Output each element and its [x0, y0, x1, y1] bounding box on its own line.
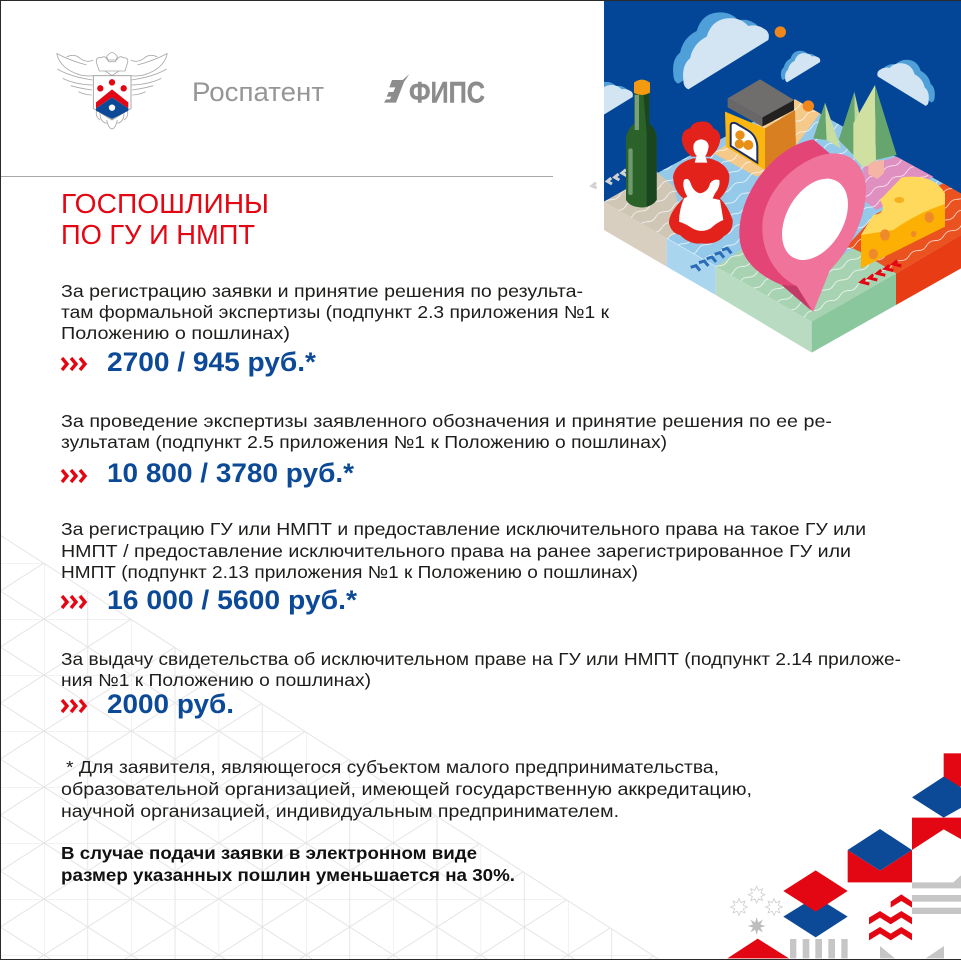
description 2 — [61, 411, 832, 452]
platform — [604, 99, 961, 353]
grey stripes right — [912, 875, 961, 914]
bold note — [61, 843, 515, 885]
description 1: там формальной экспертизы (подпункт 2.3 приложения №1 к — [61, 302, 609, 322]
price 3: 16 000 / 5600 руб.* — [107, 585, 358, 615]
illustration: isometric map with products — [580, 1, 961, 353]
cloud: small — [781, 51, 820, 82]
icon: trees — [813, 85, 897, 179]
grey triangles — [880, 946, 944, 958]
icon: red chevrons 2 — [62, 470, 85, 482]
logo: Rospatent emblem — [57, 52, 167, 129]
cloud: right — [877, 60, 935, 106]
fee block 2 — [61, 411, 832, 488]
description 3: За регистрацию ГУ или НМПТ и предоставление исключительного права на такое ГУ или — [61, 519, 866, 539]
description 3: НМПТ (подпункт 2.13 приложения №1 к Положению о пошлинах) — [61, 562, 638, 582]
cloud: left — [604, 82, 633, 114]
description 2: За проведение экспертизы заявленного обозначения и принятие решения по ее ре- — [61, 411, 832, 431]
lower feathers — [96, 110, 128, 129]
title — [61, 188, 269, 250]
footnote: * Для заявителя, являющегося субъектом малого предпринимательства, — [66, 757, 719, 777]
description 1: Положению о пошлинах) — [61, 323, 290, 343]
description 2: зультатам (подпункт 2.5 приложения №1 к Положению о пошлинах) — [61, 432, 667, 452]
description 3: НМПТ / предоставление исключительного права на ранее зарегистрированное ГУ или — [61, 541, 851, 561]
footnote — [61, 757, 752, 821]
title: ПО ГУ И НМПТ — [61, 219, 255, 250]
icon: woman in folk costume — [669, 122, 733, 244]
icon: location pin — [739, 139, 866, 312]
description 1 — [61, 281, 609, 343]
red zigzags — [869, 894, 912, 940]
grey vertical bars — [790, 939, 848, 958]
logo: FIPS: ФИПС — [409, 76, 485, 110]
fee block 1 — [61, 281, 609, 377]
orange balls — [775, 26, 814, 112]
cloud: large — [673, 12, 769, 89]
icon: wine bottle — [626, 80, 657, 207]
stars — [731, 886, 782, 935]
icon: red chevrons 3 — [62, 596, 85, 608]
envelope shape — [848, 829, 912, 882]
footnote: научной организацией, индивидуальным предпринимателем. — [61, 801, 619, 821]
fee block 4 — [61, 649, 901, 719]
red roof — [727, 939, 789, 958]
description 3 — [61, 519, 866, 582]
left wing — [57, 53, 93, 95]
description 4 — [61, 649, 901, 690]
sky background — [604, 1, 961, 203]
icon: red chevrons 4 — [62, 700, 85, 712]
footnote: образовательной организацией, имеющей государственную аккредитацию, — [61, 779, 752, 799]
logo: Rospatent wordmark: Роспатент — [192, 77, 324, 107]
price 4: 2000 руб. — [107, 689, 234, 719]
description 4: За выдачу свидетельства об исключительном праве на ГУ или НМПТ (подпункт 2.14 приложе- — [61, 649, 901, 669]
title: ГОСПОШЛИНЫ — [61, 188, 269, 219]
crowns — [96, 52, 128, 76]
icon: honey jar — [725, 79, 796, 170]
description 1: За регистрацию заявки и принятие решения по результа- — [61, 281, 583, 301]
right wing — [131, 53, 167, 95]
chevrons: blue — [691, 248, 731, 271]
fee block 3 — [61, 519, 866, 615]
logo: FIPS — [384, 74, 485, 110]
red and blue top shapes — [912, 753, 961, 850]
decoration: geometric shapes bottom right — [727, 753, 961, 958]
background triangle grid — [0, 535, 660, 960]
chevrons: grey — [592, 170, 627, 188]
bold note: размер указанных пошлин уменьшается на 30%. — [61, 865, 515, 885]
divider under logos — [0, 176, 553, 177]
chevrons: red — [861, 261, 901, 284]
shield — [93, 76, 131, 120]
price 2: 10 800 / 3780 руб.* — [107, 458, 355, 488]
description 4: ния №1 к Положению о пошлинах) — [61, 670, 371, 690]
icon: cheese — [861, 177, 945, 268]
bold note: В случае подачи заявки в электронном виде — [61, 843, 477, 863]
stacked diamonds — [783, 870, 848, 937]
price 1: 2700 / 945 руб.* — [107, 347, 317, 377]
icon: red chevrons 1 — [62, 358, 85, 370]
